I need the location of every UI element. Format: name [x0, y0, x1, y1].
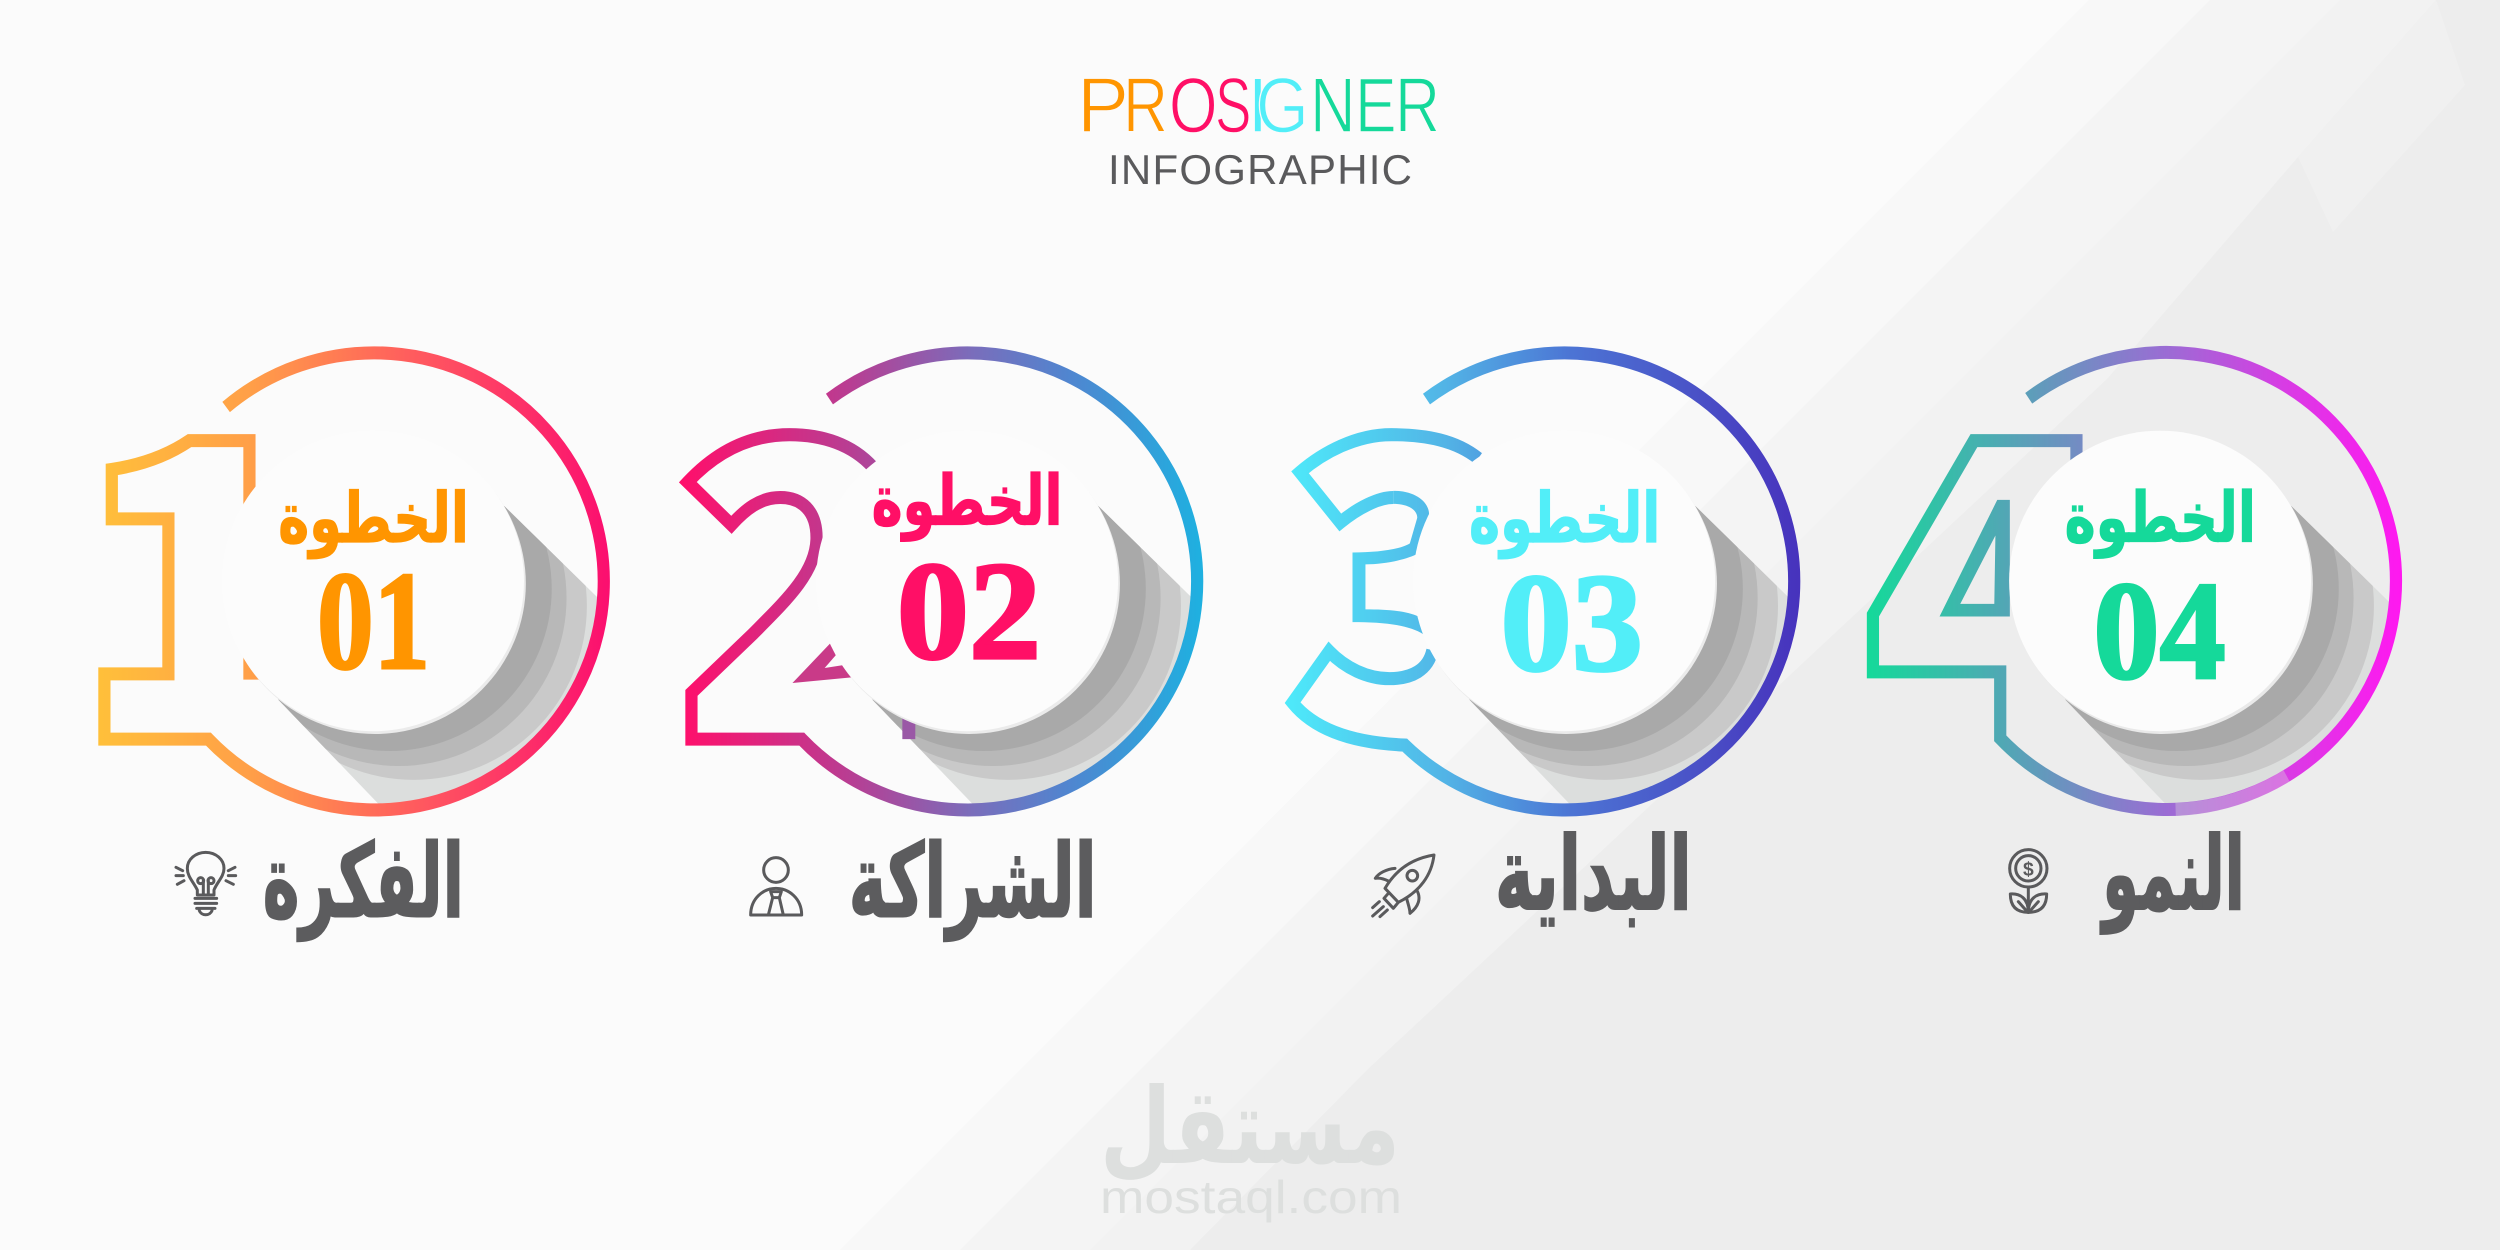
brand name: R [1395, 61, 1440, 149]
long shadow [278, 506, 597, 804]
logo [1077, 61, 1440, 193]
inner circle [222, 431, 526, 734]
brand name: P [1077, 61, 1129, 149]
watermark [1100, 1066, 1402, 1223]
step 3 [1284, 346, 1800, 928]
brand name: E [1355, 61, 1397, 149]
long shadow [1470, 506, 1788, 804]
brand name [1077, 61, 1440, 150]
brand name: O [1169, 61, 1218, 149]
subtitle: INFOGRAPHIC [1108, 146, 1412, 193]
step number: 04 [2093, 554, 2226, 709]
ring and digit 4 [1873, 352, 2396, 810]
step word: الخطوة [278, 478, 469, 560]
inner circle [1413, 431, 1717, 734]
step number: 02 [897, 534, 1041, 689]
watermark arabic: مستقل [1100, 1066, 1400, 1188]
step word: الخطوة [872, 460, 1063, 542]
label: الفكرة [263, 823, 464, 941]
inner circle [2009, 431, 2313, 734]
inner circle [816, 431, 1120, 734]
step number: 03 [1501, 546, 1643, 701]
brand name: G [1256, 63, 1309, 149]
step 4 [1866, 346, 2402, 935]
watermark latin: mostaql.com [1100, 1171, 1402, 1223]
brand name: R [1123, 61, 1168, 149]
icon: rocket [1373, 855, 1434, 917]
icon: money plant: $ [2023, 859, 2034, 880]
long shadow [2066, 506, 2389, 803]
long shadow [872, 506, 1190, 804]
step word: الخطوة [1469, 478, 1660, 560]
icon: light bulb [176, 852, 236, 915]
digit 2 base fragment [792, 643, 867, 683]
brand name: N [1310, 63, 1356, 150]
icon: money plant [2010, 850, 2047, 912]
ring and digit 1 [104, 353, 604, 810]
label: النمو [2099, 816, 2245, 934]
step number: 01 [317, 544, 430, 699]
ring and digit 2 [688, 353, 1197, 810]
ring and digit 3 [1293, 353, 1794, 810]
label: الشراكة [849, 823, 1097, 941]
brand name: S [1215, 62, 1251, 149]
brand name: I [1247, 61, 1269, 149]
step 1 [98, 346, 610, 942]
digit 2 stub [902, 715, 915, 739]
label: البداية [1495, 816, 1692, 934]
icon: person with tie [751, 858, 802, 915]
step 2 [679, 346, 1204, 942]
step word: الخطوة [2065, 477, 2256, 559]
